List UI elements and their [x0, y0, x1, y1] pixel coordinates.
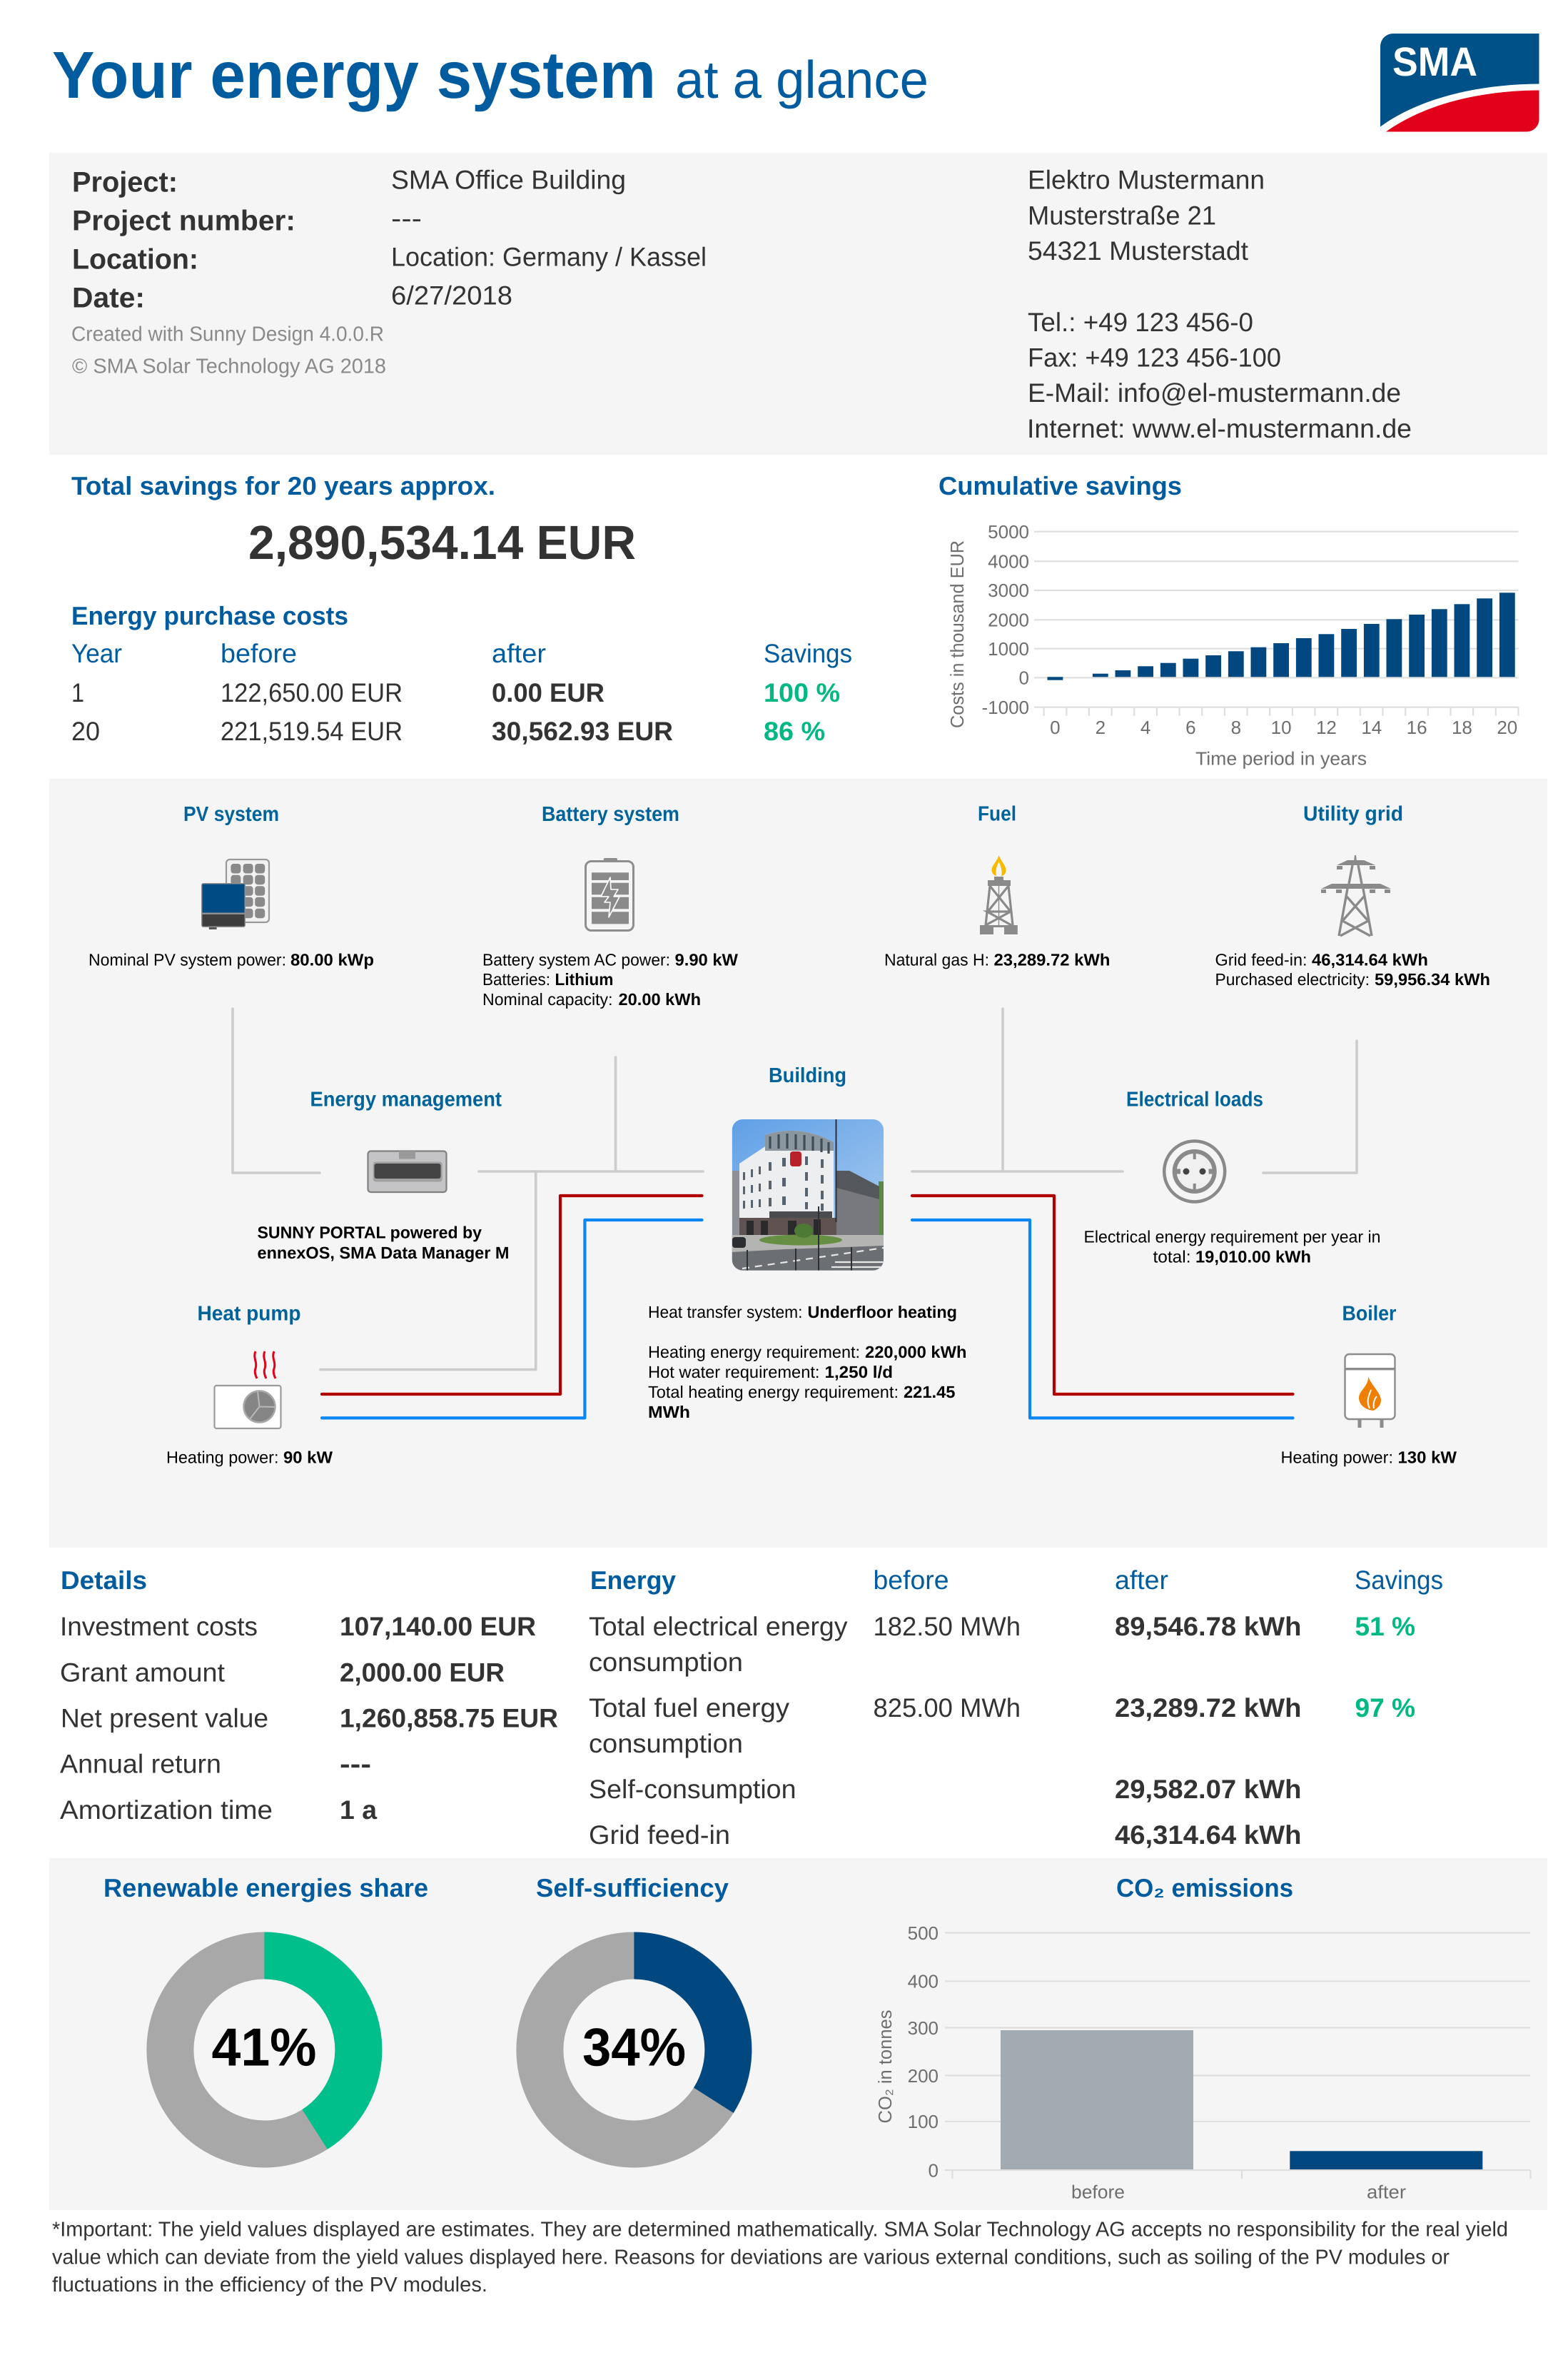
panel: system diagram: [49, 779, 1547, 1548]
table: energy purchase costs: 100 %: [764, 678, 840, 707]
text: battery data: [482, 951, 739, 1009]
project labels: [72, 167, 295, 314]
x axis labels: [1071, 2182, 1406, 2203]
y axis labels: 400: [908, 1970, 939, 1992]
table: energy purchase costs: 0.00 EUR: [492, 678, 605, 707]
connection lines: electrical: [233, 1009, 1357, 1370]
total savings value: 2,890,534.14 EUR: [248, 516, 636, 570]
table: energy: Self-consumption: [589, 1775, 796, 1804]
table: details: Amortization time: [60, 1795, 273, 1825]
y axis labels: [908, 1922, 939, 2182]
x axis labels: [1050, 717, 1517, 738]
bar: after: [1290, 2151, 1482, 2169]
table: details: Grant amount: [60, 1658, 226, 1688]
table: energy purchase costs: 86 %: [764, 717, 825, 746]
project values: 6/27/2018: [391, 281, 512, 310]
table: energy purchase costs: 122,650.00 EUR: [221, 678, 403, 707]
y axis labels: 3000: [988, 580, 1029, 601]
installer contact: 54321 Musterstadt: [1028, 236, 1249, 266]
bar chart: CO2 emissions: [874, 1922, 1530, 2203]
footnote: fluctuations in the efficiency of the PV modules.: [52, 2274, 487, 2296]
table: energy purchase costs: after: [492, 639, 546, 668]
y axis labels: 0: [1019, 667, 1029, 688]
table: energy purchase costs: 221,519.54 EUR: [221, 717, 403, 746]
text: battery data: Batteries:: [482, 970, 550, 989]
donut value: 41%: [211, 2017, 317, 2077]
y axis title: CO₂ in tonnes: [874, 2010, 896, 2123]
panel: project information: [49, 153, 1547, 455]
installer contact: Tel.: +49 123 456-0: [1028, 308, 1253, 337]
table: energy purchase costs: 20: [71, 717, 100, 746]
y axis labels: 2000: [988, 610, 1029, 631]
table: details: 107,140.00 EUR: [340, 1612, 536, 1641]
table: details: ---: [340, 1749, 371, 1779]
x axis labels: 4: [1140, 717, 1150, 738]
text: building heating data: Underfloor heating: [808, 1303, 957, 1321]
y axis labels: 1000: [988, 638, 1029, 660]
heading: CO2 emissions: CO₂ emissions: [1116, 1873, 1293, 1902]
table: energy: 89,546.78 kWh: [1115, 1612, 1302, 1641]
table: details: 1 a: [340, 1795, 377, 1825]
y axis labels: 500: [908, 1922, 939, 1944]
x axis title: Time period in years: [1195, 748, 1367, 770]
table: energy: 97 %: [1355, 1693, 1415, 1723]
table: energy purchase costs: 30,562.93 EUR: [492, 717, 673, 746]
x axis labels: 14: [1361, 717, 1382, 738]
text: building heating data: [648, 1303, 966, 1421]
y axis labels: 0: [929, 2160, 939, 2182]
x axis labels: 20: [1497, 717, 1517, 738]
table: energy purchase costs: [71, 639, 852, 746]
text: boiler data: 130 kW: [1397, 1448, 1457, 1466]
installer contact: Elektro Mustermann: [1028, 166, 1265, 194]
x axis labels: 16: [1407, 717, 1427, 738]
software credit: [71, 323, 386, 378]
text: energy management product: SUNNY PORTAL powered by: [257, 1224, 482, 1242]
heading: self-sufficiency: Self-sufficiency: [536, 1873, 729, 1902]
footnote: [52, 2219, 1508, 2296]
table: details: 1,260,858.75 EUR: [340, 1703, 558, 1733]
text: boiler data: Heating power:: [1280, 1448, 1393, 1466]
table: energy: before: [874, 1565, 949, 1595]
text: electrical load data: [1083, 1228, 1380, 1266]
project values: Location: Germany / Kassel: [391, 243, 707, 271]
text: building heating data: Total heating energy requirement:: [648, 1383, 899, 1401]
installer contact: Fax: +49 123 456-100: [1028, 343, 1281, 373]
project labels: Project number:: [72, 206, 295, 237]
text: utility grid data: Grid feed-in:: [1215, 951, 1307, 969]
table: details: [60, 1612, 558, 1825]
text: battery data: Battery system AC power:: [482, 951, 670, 969]
donut chart: self-sufficiency: [540, 1932, 752, 2144]
table: energy: Savings: [1355, 1565, 1443, 1595]
text: building heating data: 1,250 l/d: [825, 1363, 893, 1381]
heading: boiler: Boiler: [1342, 1302, 1396, 1325]
table: energy: consumption: [589, 1729, 743, 1758]
x axis labels: 0: [1050, 717, 1061, 738]
icon: heat pump: [214, 1351, 281, 1428]
text: electrical load data: Electrical energy requirement per year in: [1083, 1228, 1380, 1246]
table: energy purchase costs: before: [221, 639, 297, 668]
project values: ---: [391, 204, 422, 233]
x axis labels: 8: [1231, 717, 1241, 738]
y axis labels: 5000: [988, 521, 1029, 543]
table: energy: 182.50 MWh: [874, 1612, 1021, 1641]
table: energy: Total fuel energy: [589, 1693, 790, 1723]
table: energy: 23,289.72 kWh: [1115, 1693, 1302, 1723]
text: building heating data: Heating energy requirement:: [648, 1343, 860, 1361]
image: building photo: [732, 1119, 884, 1271]
y axis title: Costs in thousand EUR: [946, 540, 968, 728]
project values: SMA Office Building: [391, 166, 626, 194]
icon: energy manager device: [368, 1151, 447, 1192]
heading: heat pump: Heat pump: [197, 1302, 301, 1325]
heading: renewable energies share: Renewable energies share: [103, 1873, 428, 1902]
bar chart: cumulative savings: [946, 521, 1519, 770]
text: PV system data: Nominal PV system power:: [88, 951, 286, 969]
table: energy: Total electrical energy: [589, 1612, 848, 1641]
text: heat pump data: Heating power:: [166, 1448, 278, 1466]
text: fuel data: [884, 951, 1111, 969]
bar: before: [1001, 2030, 1193, 2169]
icon: power socket: [1164, 1141, 1225, 1202]
heading: electrical loads: Electrical loads: [1126, 1088, 1263, 1111]
text: boiler data: [1280, 1448, 1457, 1466]
panel: key figures: [49, 1858, 1547, 2210]
text: battery data: Nominal capacity:: [482, 990, 612, 1009]
icon: boiler: [1345, 1354, 1395, 1428]
x axis labels: before: [1071, 2182, 1125, 2203]
donut chart: renewable energies share: [170, 1932, 382, 2149]
icon: gas derrick with flame: [980, 855, 1018, 934]
icon: battery: [585, 858, 634, 931]
text: heat pump data: [166, 1448, 333, 1466]
text: battery data: 9.90 kW: [675, 951, 739, 969]
table: energy purchase costs: Year: [71, 639, 122, 668]
text: electrical load data: 19,010.00 kWh: [1195, 1248, 1311, 1266]
software credit: Created with Sunny Design 4.0.0.R: [71, 323, 384, 346]
project labels: Location:: [72, 244, 198, 276]
y axis labels: -1000: [982, 697, 1029, 718]
x axis labels: 6: [1185, 717, 1196, 738]
table: energy: consumption: [589, 1648, 743, 1677]
y axis labels: 200: [908, 2065, 939, 2087]
connection lines: heating flow: [322, 1196, 1293, 1394]
text: battery data: 20.00 kWh: [618, 990, 701, 1009]
table: details: Investment costs: [60, 1612, 258, 1641]
installer contact: [1027, 166, 1412, 443]
project labels: Project:: [72, 167, 178, 198]
donut value: 34%: [582, 2017, 686, 2077]
text: utility grid data: 46,314.64 kWh: [1312, 951, 1428, 969]
footnote: *Important: The yield values displayed are estimates. They are determined mathematically. SMA Solar Technology AG accepts no responsibility for the real yield: [52, 2219, 1508, 2242]
table: details: Net present value: [61, 1703, 268, 1733]
heading: energy purchase costs: Energy purchase costs: [71, 601, 348, 630]
logo: SMA: [1380, 34, 1539, 136]
installer contact: Musterstraße 21: [1028, 201, 1216, 230]
table: energy: Grid feed-in: [589, 1820, 730, 1850]
table: details: 2,000.00 EUR: [340, 1658, 505, 1688]
icon: transmission tower: [1321, 855, 1391, 936]
y axis labels: [982, 521, 1029, 718]
text: building heating data: Heat transfer system:: [648, 1303, 802, 1321]
table: energy purchase costs: Savings: [764, 639, 852, 668]
heading: fuel: Fuel: [978, 802, 1016, 825]
y axis labels: 100: [908, 2111, 939, 2132]
table: energy purchase costs: 1: [71, 678, 84, 707]
text: PV system data: 80.00 kWp: [290, 951, 374, 969]
text: battery data: Lithium: [555, 970, 614, 989]
x axis labels: 10: [1271, 717, 1292, 738]
text: energy management product: [257, 1224, 510, 1262]
icon: PV module and inverter: [201, 859, 269, 929]
text: fuel data: 23,289.72 kWh: [993, 951, 1111, 969]
text: utility grid data: Purchased electricity:: [1215, 970, 1370, 989]
text: building heating data: Hot water requirement:: [648, 1363, 819, 1381]
x axis labels: 2: [1096, 717, 1106, 738]
table: energy: 29,582.07 kWh: [1115, 1775, 1302, 1804]
heading: energy: Energy: [590, 1565, 676, 1595]
text: heat pump data: 90 kW: [283, 1448, 333, 1466]
title: Your energy system: [52, 38, 656, 112]
y axis labels: 4000: [988, 551, 1029, 573]
x axis labels: 12: [1316, 717, 1337, 738]
chart bars: [1048, 592, 1515, 680]
software credit: © SMA Solar Technology AG 2018: [72, 355, 386, 378]
table: energy: [589, 1565, 1443, 1850]
table: energy: 51 %: [1355, 1612, 1415, 1641]
table: energy: 825.00 MWh: [874, 1693, 1021, 1723]
heading: energy management: Energy management: [310, 1088, 502, 1111]
text: energy management product: ennexOS, SMA Data Manager M: [257, 1244, 510, 1262]
installer contact: E-Mail: info@el-mustermann.de: [1028, 378, 1401, 408]
x axis labels: 18: [1452, 717, 1472, 738]
text: building heating data: 220,000 kWh: [865, 1343, 966, 1361]
text: building heating data: MWh: [648, 1403, 690, 1421]
connection lines: heating return: [322, 1220, 1293, 1418]
text: building heating data: 221.45: [904, 1383, 955, 1401]
table: energy: 46,314.64 kWh: [1115, 1820, 1302, 1850]
text: utility grid data: [1215, 951, 1490, 989]
title: at a glance: [675, 50, 929, 109]
footnote: value which can deviate from the yield values displayed here. Reasons for deviations are various external conditions, such as soiling of the PV modules or: [52, 2246, 1450, 2269]
text: electrical load data: total:: [1153, 1248, 1190, 1266]
text: fuel data: Natural gas H:: [884, 951, 989, 969]
installer contact: Internet: www.el-mustermann.de: [1027, 414, 1412, 443]
y axis labels: 300: [908, 2017, 939, 2039]
heading: utility grid: Utility grid: [1303, 802, 1403, 825]
heading: PV system: PV system: [183, 803, 279, 826]
table: energy: after: [1115, 1565, 1168, 1595]
text: utility grid data: 59,956.34 kWh: [1375, 970, 1490, 989]
heading: details: Details: [61, 1565, 147, 1595]
project labels: Date:: [72, 283, 145, 314]
heading: total savings: Total savings for 20 years approx.: [71, 471, 495, 500]
heading: cumulative savings: Cumulative savings: [939, 471, 1182, 500]
x axis labels: after: [1367, 2182, 1406, 2203]
table: details: Annual return: [60, 1749, 221, 1779]
project values: [391, 166, 707, 310]
heading: battery system: Battery system: [542, 803, 679, 826]
logo: SMA: SMA: [1392, 39, 1477, 85]
heading: building: Building: [769, 1064, 846, 1087]
